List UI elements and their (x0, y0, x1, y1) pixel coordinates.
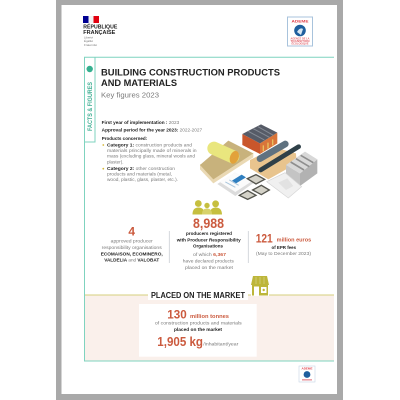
stat: approved organisations: VALDELIA and VALOBAT (104, 258, 159, 264)
stat: producers registered: of which 6,367 (193, 252, 226, 258)
logo: République Française: Égalité (84, 38, 94, 43)
concrete blocks (286, 152, 317, 186)
bullet: category 1 (102, 144, 104, 146)
text block: programme details: wood, plastic, glass, plaster, etc.). (107, 177, 178, 182)
logo: République Française: Fraternité (84, 43, 98, 47)
text block: programme details (102, 120, 203, 182)
stat: EPR fees (256, 234, 311, 257)
stat: approved organisations: 4 (128, 225, 135, 239)
white sink (267, 173, 302, 198)
title: AND MATERIALS (101, 78, 178, 89)
stat: producers registered: 8,988 (193, 215, 224, 231)
panel: market figures: /inhabitant/year (203, 341, 239, 347)
divider (247, 231, 249, 263)
text block: programme details: Products concerned: (102, 136, 148, 141)
text block: programme details: Approval period for the year 2023: 2022-2027 (102, 128, 203, 133)
stat: approved organisations: approved producer (111, 239, 153, 245)
icon: shop (251, 276, 269, 296)
white document page (62, 5, 337, 394)
stat: EPR fees: 121 (256, 234, 273, 246)
tab label: facts and figures: FACTS & FIGURES (87, 82, 94, 131)
gray page frame (56, 0, 343, 400)
logo: small ADEME footer (299, 366, 315, 382)
text block: programme details: First year of implementation : 2023 (102, 120, 180, 125)
pallet with insulation roll (200, 141, 253, 183)
beige board and pipes (250, 144, 299, 179)
logo: ADEME: AGENCE DE LA (290, 38, 310, 40)
divider (168, 231, 170, 263)
stat: producers registered (176, 215, 241, 271)
stat: producers registered: have declared products (183, 258, 234, 264)
stat: approved organisations: ECOMAISON, ECOMINERO, (101, 251, 163, 257)
text block: programme details: materials principally made of minerals in (107, 148, 197, 153)
title (101, 67, 281, 89)
logo: small ADEME footer: ADEME (302, 366, 313, 370)
stat: EPR fees: (May to December 2023) (256, 251, 311, 257)
logo: République Française: FRANÇAISE (83, 30, 116, 36)
illustration: construction materials (200, 124, 317, 199)
tiles (239, 175, 269, 199)
section rule: placed on the market (85, 294, 334, 296)
logo: ADEME: ÉCOLOGIQUE (292, 42, 309, 46)
stat: producers registered: with Producer Responsibility (176, 237, 241, 243)
heading: placed on the market: PLACED ON THE MARKET (151, 291, 245, 300)
panel: market figures: of construction products and materials (155, 320, 242, 326)
subtitle: Key figures 2023 (101, 92, 159, 100)
logo: ADEME: ADEME (292, 20, 309, 24)
stat: 130 million tonnes: 130 (167, 307, 187, 321)
stat: approved organisations: responsibility organisations (102, 245, 162, 251)
panel: market figures: placed on the market (174, 327, 222, 333)
text block: programme details: plaster). (107, 159, 124, 164)
stat: producers registered: Organisations (193, 244, 223, 250)
text block: programme details: Category 2: other construction (107, 166, 175, 171)
stat: approved organisations (101, 225, 163, 264)
logo: ADEME (288, 17, 312, 46)
stat: 1,905 kg per inhabitant: 1,905 kg (157, 334, 203, 349)
stat: EPR fees: of EPR fees (272, 245, 296, 251)
icon: group of people (192, 200, 222, 214)
panel: market figures: million tonnes (190, 314, 229, 320)
logo: République Française (83, 16, 118, 47)
logo: République Française: RÉPUBLIQUE (83, 23, 118, 31)
stat: EPR fees: million euros (277, 237, 311, 243)
panel: placed on the market background (85, 295, 334, 361)
logo: République Française: Liberté (84, 36, 94, 40)
text block: programme details: products and materials (metal, (107, 171, 172, 176)
document (217, 173, 254, 196)
text block: programme details: mass (excluding glass, mineral wools and (107, 154, 195, 159)
panel: market figures (139, 304, 257, 357)
icon: tab green dot (86, 66, 93, 72)
logo: ADEME: TRANSITION (290, 40, 310, 43)
bullet: category 2 (102, 168, 104, 170)
title: BUILDING CONSTRUCTION PRODUCTS (101, 67, 281, 78)
stat: producers registered: producers registered (186, 231, 232, 237)
brick stack (242, 124, 277, 154)
text block: programme details: Category 1: construction products and (107, 142, 192, 148)
stat: producers registered: placed on the market (185, 265, 234, 271)
panel: teal frame with facts and figures tab (84, 57, 334, 361)
